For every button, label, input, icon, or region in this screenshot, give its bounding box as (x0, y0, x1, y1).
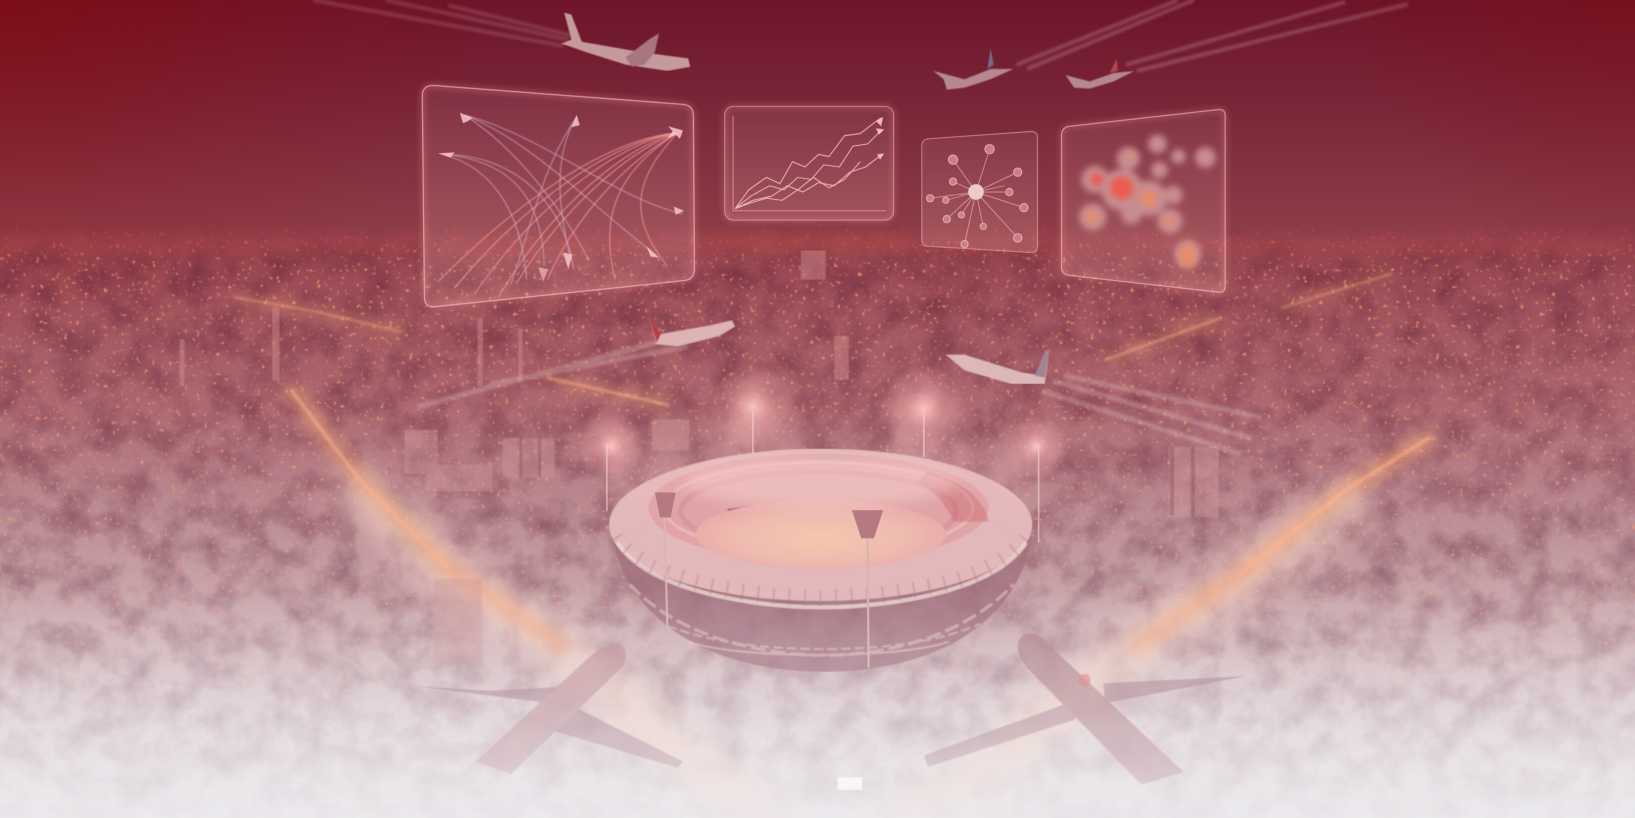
glowing roads (235, 273, 1429, 818)
aircraft: mid left (649, 317, 735, 346)
route curves (438, 115, 683, 297)
demand heatmap panel (1061, 109, 1225, 292)
contrails: top left aircraft (313, 0, 571, 46)
contrails: mid aircraft (417, 342, 1262, 454)
stadium pitch (696, 500, 946, 569)
aircraft: mid right (946, 350, 1049, 384)
stadium lower body (611, 522, 1032, 672)
flight routes panel (422, 85, 694, 307)
flight paths in the sky (313, 0, 1408, 454)
aircraft: top right, right one (1066, 58, 1134, 89)
aircraft: foreground left (417, 643, 683, 774)
heat blobs: warm core (1085, 151, 1196, 268)
network hub (968, 184, 984, 200)
chart lines (735, 118, 882, 209)
stadium (609, 449, 1032, 672)
chart arrowheads (876, 117, 884, 160)
bright marker at bottom centre (837, 777, 862, 790)
chart axes (733, 116, 886, 211)
growth line chart panel (725, 106, 894, 220)
stadium seating bowl (649, 454, 989, 562)
heat blobs: cool halo (1079, 135, 1216, 267)
horizon city glow (0, 236, 1635, 252)
aircraft: top left (561, 13, 690, 71)
stadium floodlights (578, 363, 1069, 668)
network graph panel (922, 131, 1038, 252)
aircraft: foreground right (924, 634, 1246, 785)
network nodes (926, 145, 1028, 248)
night city texture (0, 228, 1635, 816)
aircraft: top right, left one (933, 48, 1014, 90)
city towers (179, 250, 1219, 663)
contrails: top right aircraft (1017, 0, 1408, 71)
route plane markers (438, 113, 684, 282)
stadium roof ring (609, 449, 1032, 601)
network edges (930, 149, 1024, 244)
